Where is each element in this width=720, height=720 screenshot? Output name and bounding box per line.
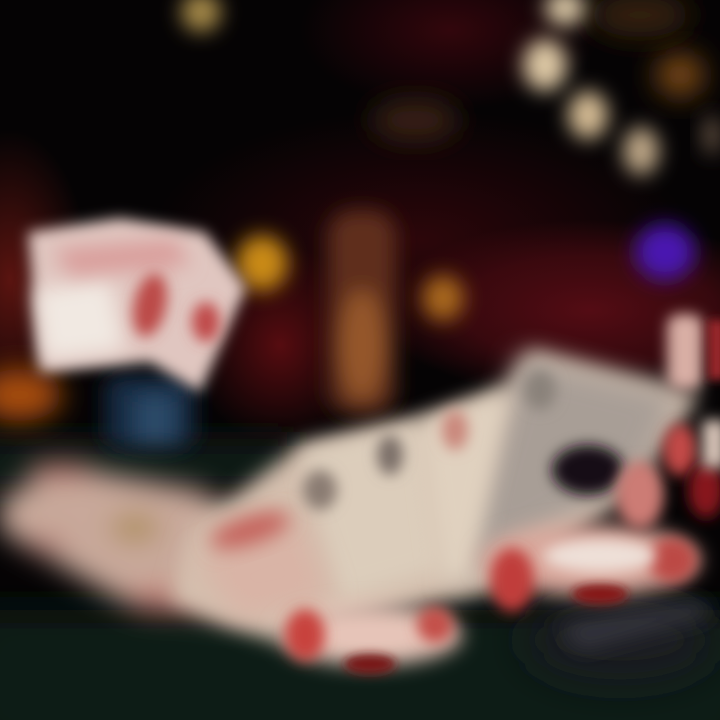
cards spread on table left xyxy=(0,461,300,620)
background: dark maroon room xyxy=(0,0,720,445)
poker chips bottom center xyxy=(278,605,462,674)
fan of cards center xyxy=(170,350,700,640)
held cards left xyxy=(28,218,246,392)
pillar glow xyxy=(328,210,396,415)
ceiling fixture xyxy=(371,100,459,140)
orange glow left xyxy=(0,369,62,421)
ceiling lights xyxy=(181,0,720,175)
poker chips stack right xyxy=(480,314,720,680)
blue figure under cards xyxy=(105,375,195,447)
light: top gold xyxy=(181,0,221,32)
chandelier lights xyxy=(523,0,720,175)
gold and purple lamps xyxy=(236,224,695,321)
table surface: dark green xyxy=(0,445,720,720)
